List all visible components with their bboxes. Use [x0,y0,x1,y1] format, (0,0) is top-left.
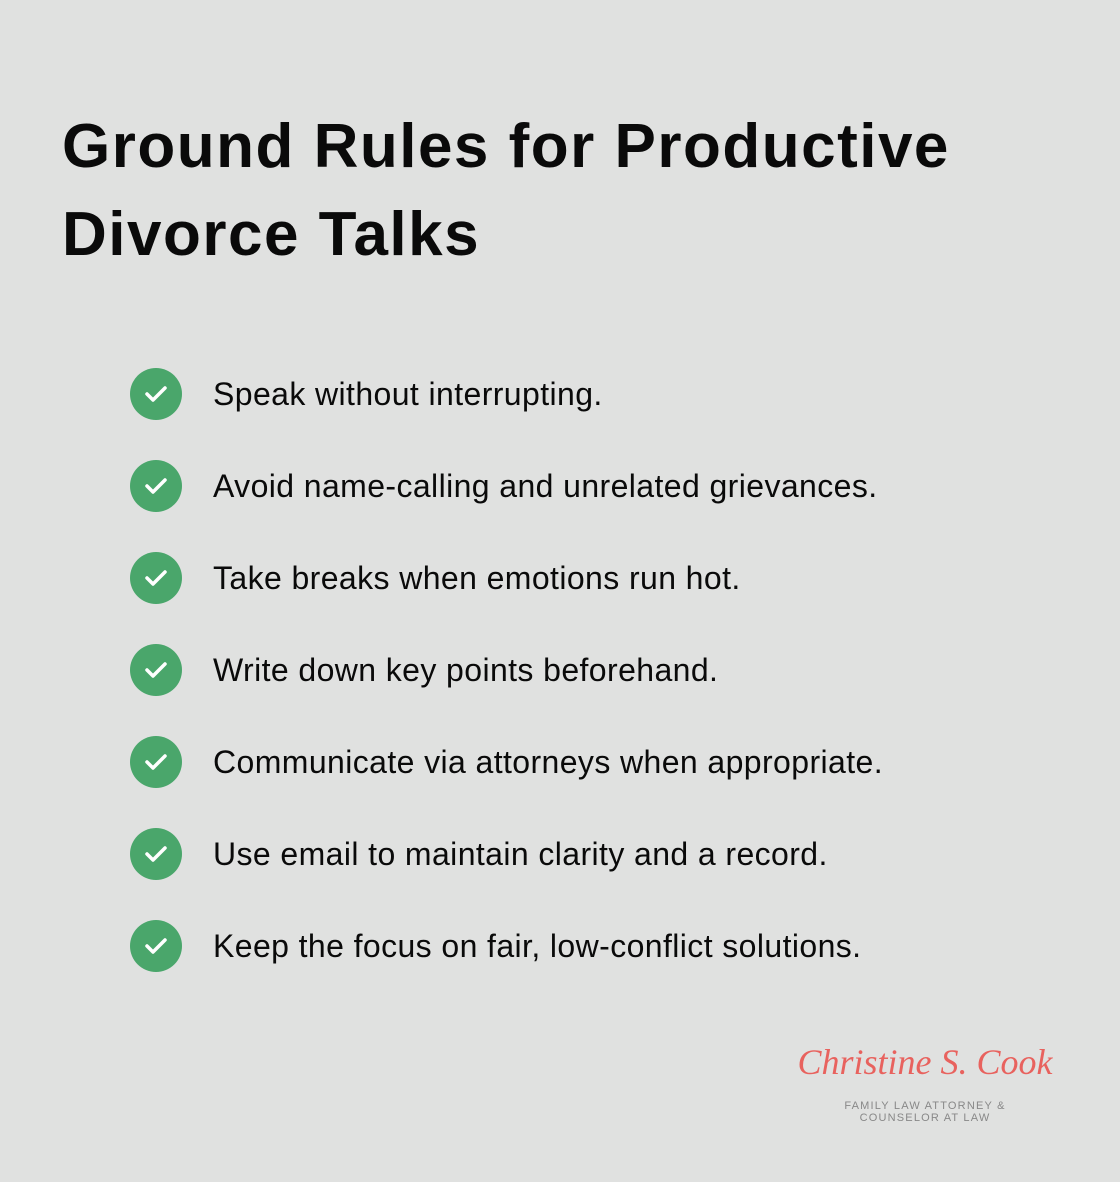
item 5 [130,736,883,788]
list [130,368,883,972]
item 6: Use email to maintain clarity and a record. [213,836,828,872]
title [62,112,950,269]
item 4: Write down key points beforehand. [213,652,718,688]
title: Divorce Talks [62,200,480,269]
item 3: Take breaks when emotions run hot. [213,560,741,596]
item 5: Communicate via attorneys when appropriate. [213,744,883,780]
item 7: Keep the focus on fair, low-conflict solutions. [213,928,861,964]
item 6 [130,828,828,880]
item 3 [130,552,741,604]
item 1 [130,368,603,420]
item 2: Avoid name-calling and unrelated grievances. [213,468,878,504]
logo: FAMILY LAW ATTORNEY & [844,1100,1006,1112]
logo: COUNSELOR AT LAW [860,1112,990,1124]
item 2 [130,460,878,512]
title: Ground Rules for Productive [62,112,950,181]
logo [797,1042,1053,1124]
item 1: Speak without interrupting. [213,376,603,412]
logo: Christine S. Cook [797,1042,1052,1082]
item 7 [130,920,861,972]
item 4 [130,644,718,696]
